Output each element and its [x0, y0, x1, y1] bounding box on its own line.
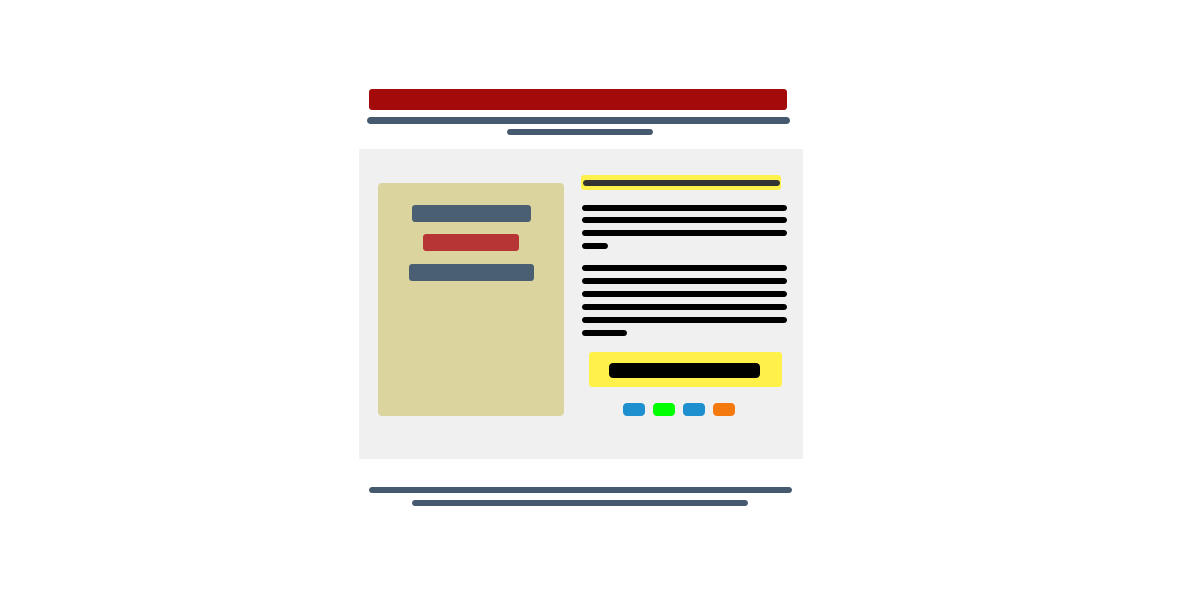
footer line 1	[369, 487, 792, 493]
subtitle line 2	[507, 129, 653, 135]
subtitle line 1	[367, 117, 790, 124]
card red label	[423, 234, 519, 251]
footer line 2	[412, 500, 748, 506]
highlighted heading	[581, 175, 781, 190]
paragraph 2	[582, 265, 787, 336]
paragraph 1	[582, 205, 787, 249]
title bar	[369, 89, 787, 110]
panel: main	[359, 149, 803, 459]
card heading bar	[412, 205, 531, 222]
card bar	[409, 264, 534, 281]
icons: social pills	[623, 403, 735, 416]
card: left	[378, 183, 564, 416]
button	[589, 352, 782, 387]
